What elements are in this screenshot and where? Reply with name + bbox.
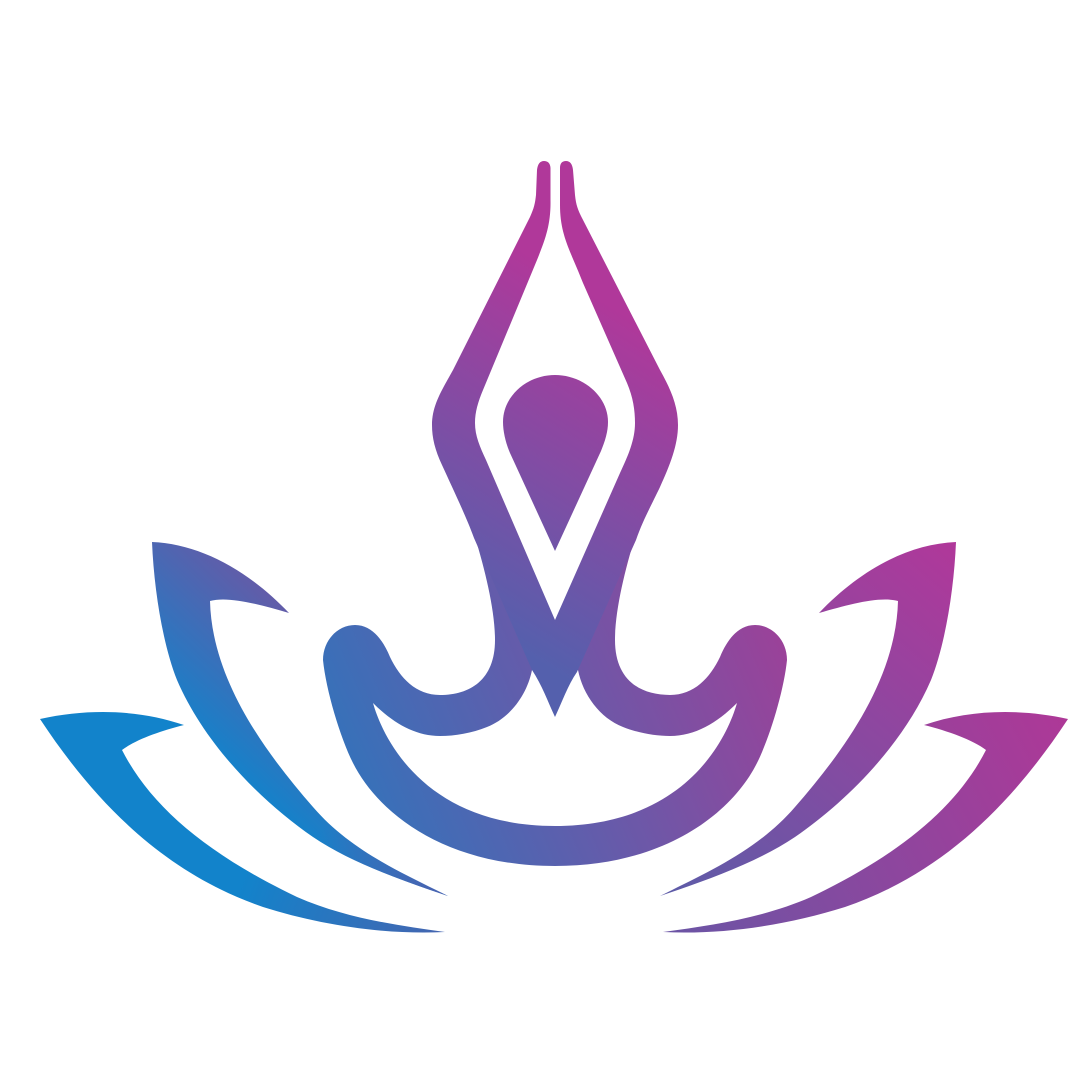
right outer petal: [663, 712, 1068, 933]
praying hands and torso: [432, 161, 678, 717]
head: teardrop: [503, 375, 608, 551]
right inner petal: [660, 542, 956, 896]
left outer petal: [40, 712, 445, 933]
left inner petal: [152, 542, 448, 896]
crossed legs: U-shaped central petal: [323, 537, 787, 866]
